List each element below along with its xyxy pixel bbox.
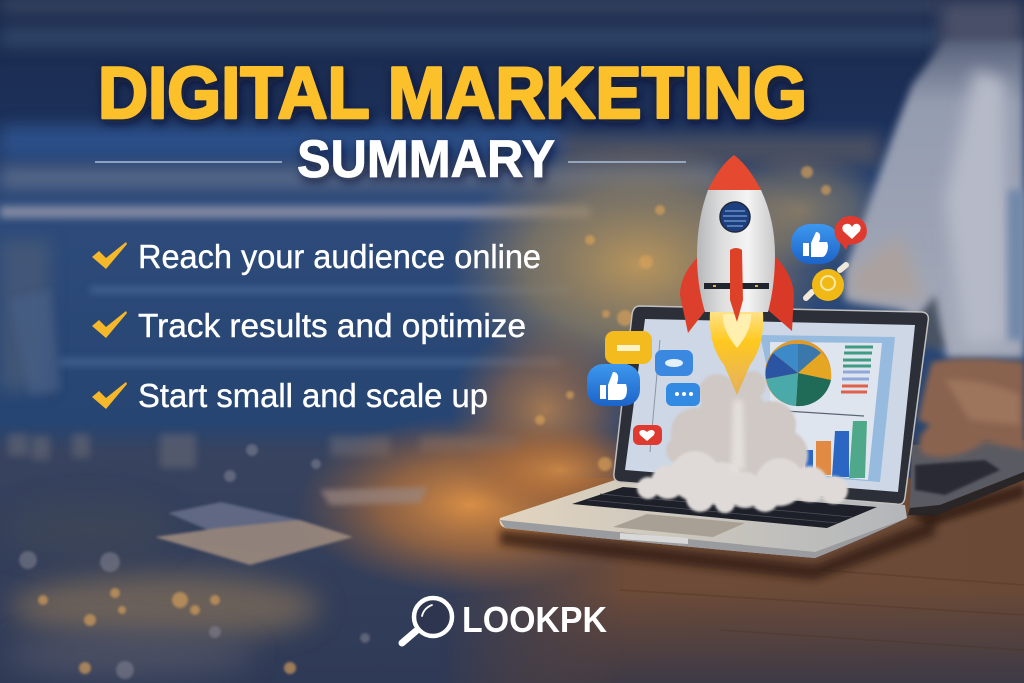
laptop base — [500, 480, 907, 558]
table grain — [620, 570, 1024, 650]
paper on desk — [155, 502, 353, 565]
right fin — [768, 256, 794, 331]
check icon — [92, 242, 127, 269]
keyboard — [572, 487, 877, 528]
laptop screen — [614, 306, 928, 504]
flame — [710, 312, 763, 395]
dots chat bubble — [666, 383, 700, 406]
logo: LOOKPK — [462, 599, 607, 640]
main laptop — [500, 306, 935, 580]
thumbs-up bubble — [791, 224, 840, 264]
heart bubble — [835, 216, 867, 250]
rocket body — [697, 190, 775, 312]
rocket — [680, 155, 794, 395]
cloud chat bubble — [655, 350, 693, 376]
legend lines — [841, 347, 873, 392]
blocks row — [8, 434, 520, 468]
check icon — [92, 382, 127, 409]
yellow bubble — [605, 331, 652, 364]
band — [704, 283, 769, 289]
bullet: start: Start small and scale up — [138, 377, 488, 414]
faded axis left — [650, 340, 660, 452]
rocket exhaust smoke — [637, 371, 848, 513]
title: DIGITAL MARKETING — [98, 53, 807, 134]
silver tab — [620, 533, 688, 544]
person hand — [918, 358, 1024, 457]
axis line — [770, 410, 864, 416]
nose cone — [708, 155, 761, 190]
social icons left — [587, 331, 700, 445]
subtitle with rules: SUMMARY — [297, 130, 555, 189]
second laptop — [908, 440, 1024, 526]
table — [440, 478, 1024, 683]
social icons right — [791, 216, 867, 301]
laptop shadow — [500, 518, 935, 580]
check icon — [92, 311, 127, 338]
trackpad — [613, 514, 745, 537]
bullet: track: Track results and optimize — [138, 307, 526, 344]
bullet: reach: Reach your audience online — [138, 238, 541, 275]
logo — [402, 598, 607, 643]
dashboard display — [625, 319, 915, 492]
left bokeh band — [10, 573, 320, 641]
yellow badge — [806, 265, 846, 301]
centre fin — [730, 248, 743, 322]
warm bokeh haze — [450, 140, 830, 390]
person sleeve — [845, 0, 1024, 358]
heart badge — [633, 425, 662, 445]
bar chart — [805, 421, 867, 478]
icon: magnifier — [402, 598, 452, 643]
large thumbs-up bubble — [587, 364, 640, 406]
pie chart — [765, 340, 831, 406]
background streaks — [0, 0, 940, 390]
orange glow — [295, 415, 645, 595]
bokeh dots — [38, 166, 831, 674]
porthole — [720, 202, 750, 232]
left fin — [680, 257, 705, 333]
